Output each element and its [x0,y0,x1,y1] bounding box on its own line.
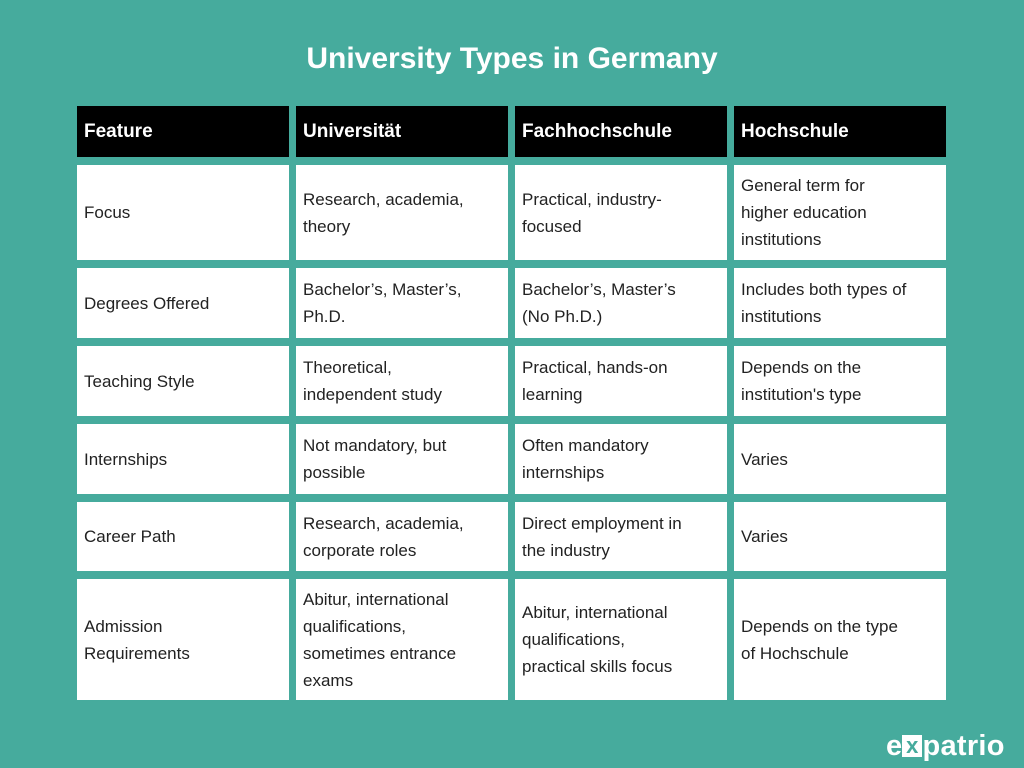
table: Theoretical, [303,358,392,377]
table: Feature [84,121,153,142]
table: Teaching Style [84,372,195,390]
table: higher education [741,203,867,222]
table: Universität [303,121,401,142]
table: Fachhochschule [522,121,672,142]
logo: e patrio [886,730,1005,762]
table: Bachelor’s, Master’s [522,280,676,299]
table: Internships [84,450,167,468]
table: corporate roles [303,540,416,560]
table: Includes both types of [741,280,906,299]
title: University Types in Germany [306,42,718,75]
table: Research, academia, [303,190,464,208]
table: independent study [303,385,442,404]
table: of Hochschule [741,644,849,662]
row: teaching [77,346,946,416]
table: institutions [741,230,821,249]
table: Degrees Offered [84,294,209,312]
table: Often mandatory [522,436,649,455]
table: learning [522,385,582,404]
table: Research, academia, [303,514,464,532]
table: Depends on the [741,358,861,377]
logo: x [906,733,919,758]
table: (No Ph.D.) [522,307,602,326]
table: Ph.D. [303,307,346,326]
row: focus [77,165,946,260]
row: degrees [77,268,946,338]
row: internships [77,424,946,494]
table: Depends on the type [741,616,898,636]
table: Varies [741,527,788,546]
table: Career Path [84,527,176,546]
table: General term for [741,176,865,195]
table: qualifications, [303,616,406,636]
table: Abitur, international [522,603,668,622]
table: Practical, industry- [522,190,662,208]
table: possible [303,463,365,482]
table: Varies [741,450,788,468]
table: focused [522,216,582,236]
table: Bachelor’s, Master’s, [303,280,461,299]
table: qualifications, [522,630,625,649]
table: Practical, hands-on [522,358,668,377]
table: internships [522,463,604,482]
table: theory [303,216,350,236]
table: institution's type [741,385,861,404]
table: Direct employment in [522,514,682,532]
table: Focus [84,203,130,222]
header row [77,106,946,157]
table: institutions [741,307,821,326]
table: Abitur, international [303,590,449,608]
row: admission [77,579,946,700]
table: the industry [522,540,610,560]
table: Requirements [84,644,190,662]
table: Not mandatory, but [303,436,446,455]
table: exams [303,670,353,690]
table: practical skills focus [522,657,672,676]
table: Hochschule [741,121,849,142]
row: career [77,502,946,571]
table: sometimes entrance [303,644,456,662]
table: Admission [84,616,162,636]
